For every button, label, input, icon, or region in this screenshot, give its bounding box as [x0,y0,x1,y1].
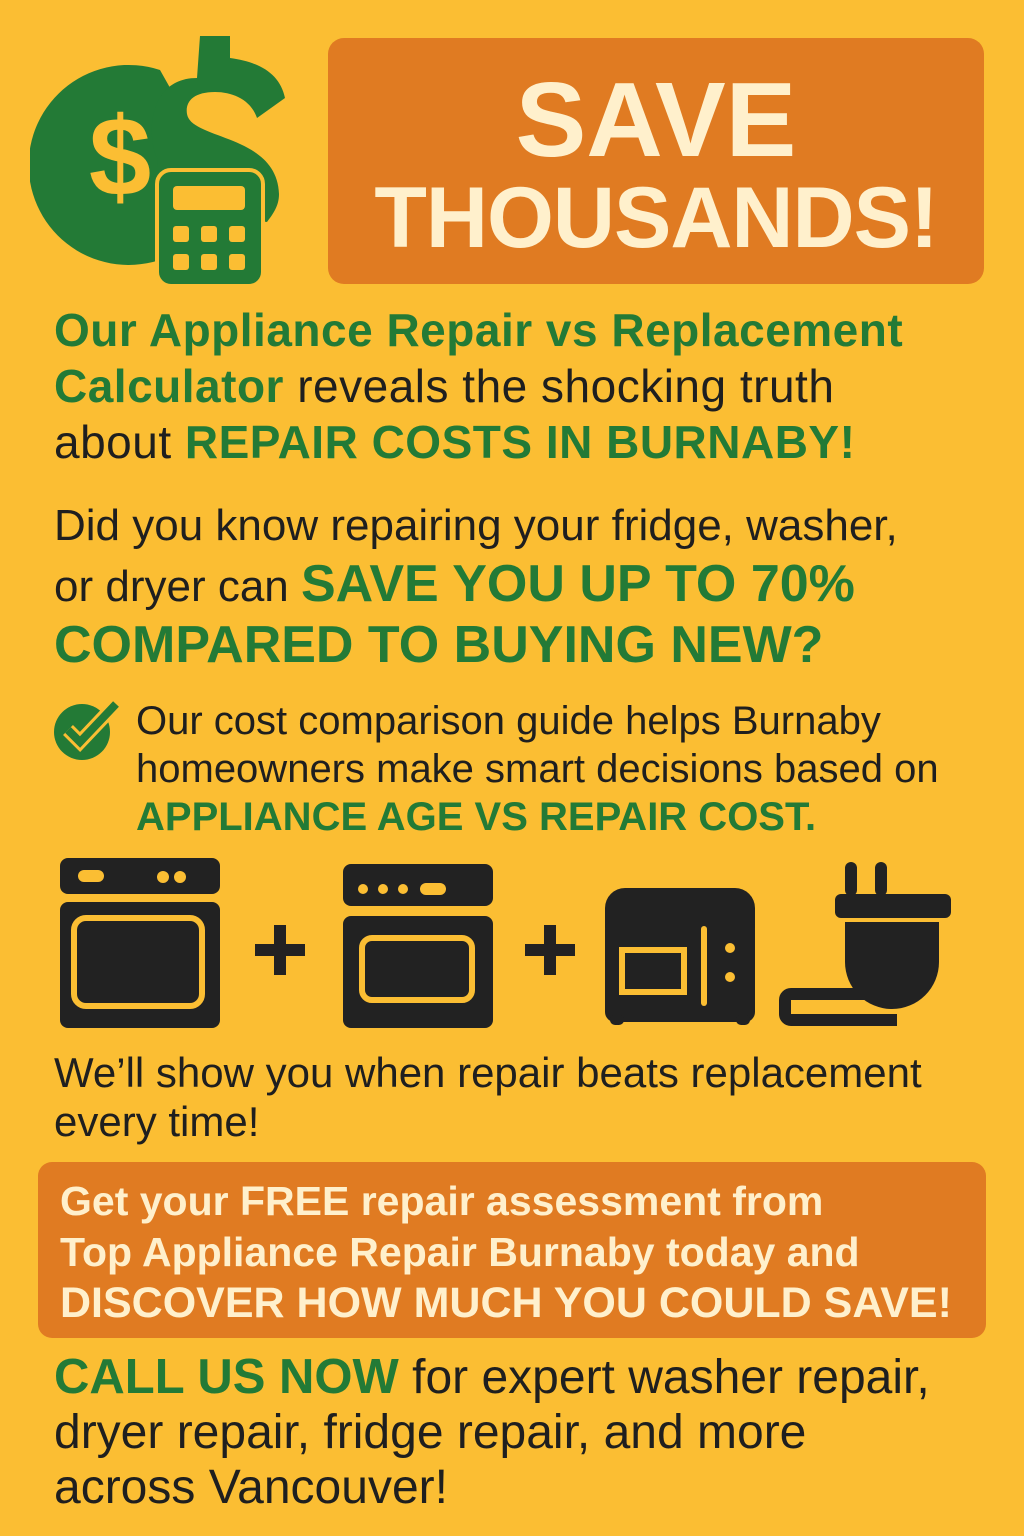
repair beats replacement text [54,1049,922,1145]
plus [255,925,305,975]
guide text [136,699,939,839]
plus [525,925,575,975]
icon: microwave [605,888,755,1025]
icon: oven [343,864,493,1028]
closing text: dryer repair, fridge repair, and more [54,1406,806,1459]
icon: plug [785,862,951,1020]
intro paragraph: Calculator reveals the shocking truth [54,360,834,412]
intro paragraph [54,304,903,468]
guide text: homeowners make smart decisions based on [136,747,939,791]
repair beats replacement text: every time! [54,1098,259,1145]
guide text: APPLIANCE AGE VS REPAIR COST. [136,795,816,839]
call-to-action box [38,1162,986,1338]
title banner [328,38,984,284]
appliance icons row [60,858,951,1028]
CTA text [60,1178,952,1327]
CTA text: Top Appliance Repair Burnaby today and [60,1229,860,1275]
title banner: SAVE [516,61,796,179]
icon: checkmark [54,701,119,760]
savings paragraph: COMPARED TO BUYING NEW? [54,616,823,674]
savings paragraph [54,501,898,674]
intro paragraph: about REPAIR COSTS IN BURNABY! [54,416,855,468]
icon: money and calculator [30,36,285,284]
guide text: Our cost comparison guide helps Burnaby [136,699,881,743]
closing text [54,1350,930,1514]
repair beats replacement text: We’ll show you when repair beats replacement [54,1049,922,1096]
closing text: across Vancouver! [54,1461,448,1514]
closing text: CALL US NOW for expert washer repair, [54,1350,930,1404]
icon: money and calculator: $ [89,94,151,219]
intro paragraph: Our Appliance Repair vs Replacement [54,304,903,356]
CTA text: Get your FREE repair assessment from [60,1178,823,1224]
title banner: THOUSANDS! [374,170,938,266]
savings paragraph: or dryer can SAVE YOU UP TO 70% [54,555,855,613]
CTA text: DISCOVER HOW MUCH YOU COULD SAVE! [60,1279,952,1327]
icon: washer [60,858,220,1028]
savings paragraph: Did you know repairing your fridge, washer, [54,501,898,550]
